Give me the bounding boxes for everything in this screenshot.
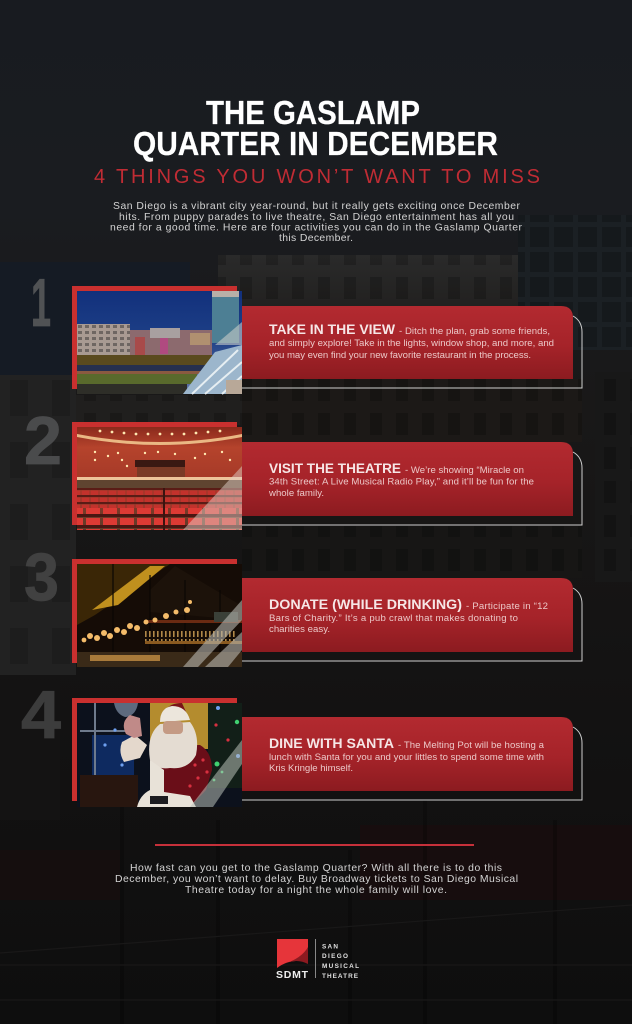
logo mark: [277, 939, 308, 968]
copy: DINE WITH SANTA: [269, 736, 394, 751]
divider: [155, 844, 474, 846]
number 4: 4: [21, 677, 61, 753]
red frame 3: [72, 559, 237, 663]
closing text block: How fast can you get to the Gaslamp Quarter? With all there is to do this: [130, 863, 502, 874]
copy: and simply explore! Take in the lights, window shop, and more, and: [269, 338, 554, 349]
intro text block: [110, 201, 523, 244]
copy: Bars of Charity.” It’s a pub crawl that makes donating to: [269, 613, 518, 624]
item 4: dine with santa: [21, 677, 582, 807]
logo wordmark: [322, 944, 359, 980]
photo: santa: [77, 703, 242, 807]
copy: - The Melting Pot will be hosting a: [398, 740, 545, 751]
copy: lunch with Santa for you and your littles to spend some time with: [269, 752, 544, 763]
intro text block: need for a good time. Here are four activities you can do in the Gaslamp Quarter: [110, 222, 523, 234]
copy: TAKE IN THE VIEW: [269, 322, 395, 337]
copy: [269, 736, 545, 774]
photo: theatre: [77, 427, 242, 530]
logo initials: SDMT: [276, 969, 309, 981]
red panel: [242, 306, 573, 379]
title: THE GASLAMP: [206, 94, 420, 131]
item 2: visit the theatre: [24, 403, 582, 530]
photo: bar: [77, 564, 242, 667]
number 2: 2: [24, 403, 62, 479]
red panel: [242, 578, 573, 652]
copy: [268, 461, 534, 499]
red frame 4: [72, 698, 237, 801]
item 1: take in the view: [31, 265, 582, 394]
photo: city skyline: [77, 291, 242, 394]
number 1: 1: [31, 265, 51, 341]
intro text block: this December.: [279, 233, 353, 244]
red panel: [242, 717, 573, 791]
copy: - Ditch the plan, grab some friends,: [399, 326, 550, 337]
copy: VISIT THE THEATRE: [269, 461, 401, 476]
copy: [269, 322, 554, 361]
logo wordmark: THEATRE: [322, 973, 359, 980]
red frame 2: [72, 422, 237, 525]
item 3: donate while drinking: [24, 539, 582, 667]
copy: you may even find your new favorite restaurant in the process.: [269, 350, 531, 361]
copy: - We’re showing “Miracle on: [405, 465, 524, 476]
copy: - Participate in “12: [466, 601, 548, 612]
closing text block: December, you won’t want to delay. Buy Broadway tickets to San Diego Musical: [115, 874, 518, 885]
white outline: [242, 727, 582, 800]
copy: charities easy.: [269, 624, 330, 635]
copy: DONATE (WHILE DRINKING): [269, 597, 462, 612]
intro text block: hits. From puppy parades to live theatre, San Diego entertainment has all you: [119, 212, 514, 223]
title: QUARTER IN DECEMBER: [133, 125, 498, 162]
title: [133, 94, 498, 162]
copy: [269, 597, 548, 635]
white outline: [242, 588, 582, 661]
white outline: [242, 316, 582, 388]
red frame 1: [72, 286, 237, 389]
copy: Kris Kringle himself.: [269, 763, 353, 774]
red panel: [242, 442, 573, 516]
closing text block: [115, 863, 518, 896]
copy: 34th Street: A Live Musical Radio Play,” and it’ll be fun for the: [269, 476, 534, 488]
logo wordmark: DIEGO: [322, 953, 348, 960]
logo wordmark: SAN: [322, 944, 338, 950]
white outline: [242, 452, 582, 525]
intro text block: San Diego is a vibrant city year-round, but it really gets exciting once December: [113, 201, 521, 212]
number 3: 3: [24, 539, 59, 615]
subtitle: 4 THINGS YOU WON’T WANT TO MISS: [94, 166, 540, 188]
copy: whole family.: [268, 488, 324, 499]
logo: SDMT: [276, 939, 359, 981]
logo wordmark: MUSICAL: [322, 963, 359, 970]
closing text block: Theatre today for a night the whole family will love.: [185, 885, 447, 896]
